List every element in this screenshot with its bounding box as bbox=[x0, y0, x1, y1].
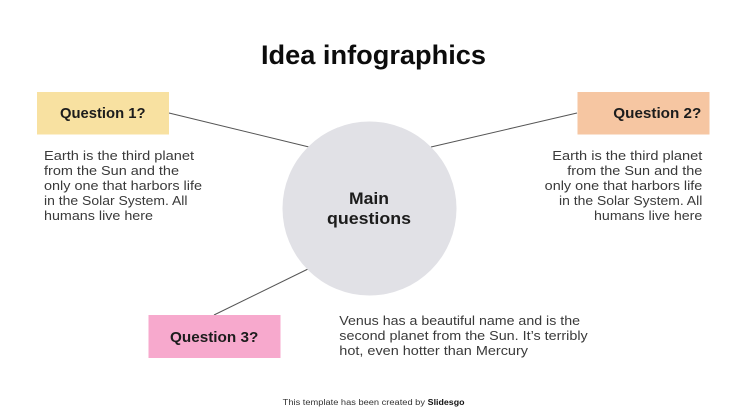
connector: question 3 to main circle bbox=[214, 269, 308, 315]
text block: question 3 description bbox=[339, 314, 589, 358]
text block: question 1 description: from the Sun and the bbox=[44, 164, 179, 178]
title: Idea infographics bbox=[261, 40, 486, 70]
panel: question 2 label: Question 2? bbox=[613, 105, 701, 122]
text block: question 2 description: from the Sun and the bbox=[567, 164, 702, 178]
text block: question 1 description bbox=[44, 149, 202, 223]
main circle: Main bbox=[349, 189, 389, 208]
footer credit: This template has been created by bbox=[283, 398, 425, 407]
text block: question 2 description: only one that harbors life bbox=[545, 179, 702, 193]
text block: question 3 description: hot, even hotter than Mercury bbox=[339, 344, 529, 358]
panel: question 2 label bbox=[578, 92, 710, 134]
connector: question 1 to main circle bbox=[169, 113, 309, 147]
text block: question 2 description: humans live here bbox=[594, 209, 702, 223]
text block: question 2 description: Earth is the third planet bbox=[552, 149, 703, 163]
connector: question 2 to main circle bbox=[431, 113, 577, 147]
main circle: questions bbox=[327, 209, 411, 228]
footer credit: Slidesgo bbox=[428, 398, 465, 407]
main circle bbox=[282, 122, 456, 296]
text block: question 2 description: in the Solar System. All bbox=[559, 194, 702, 208]
text block: question 3 description: second planet from the Sun. It’s terribly bbox=[339, 329, 589, 343]
panel: question 3 label bbox=[148, 315, 280, 358]
text block: question 1 description: humans live here bbox=[44, 209, 153, 223]
text block: question 3 description: Venus has a beautiful name and is the bbox=[339, 314, 580, 328]
text block: question 1 description: Earth is the third planet bbox=[44, 149, 195, 163]
text block: question 1 description: only one that harbors life bbox=[44, 179, 202, 193]
panel: question 3 label: Question 3? bbox=[170, 329, 258, 346]
text block: question 2 description bbox=[545, 149, 703, 223]
text block: question 1 description: in the Solar System. All bbox=[44, 194, 188, 208]
panel: question 1 label: Question 1? bbox=[60, 105, 146, 122]
footer credit bbox=[283, 398, 465, 407]
panel: question 1 label bbox=[37, 92, 169, 134]
